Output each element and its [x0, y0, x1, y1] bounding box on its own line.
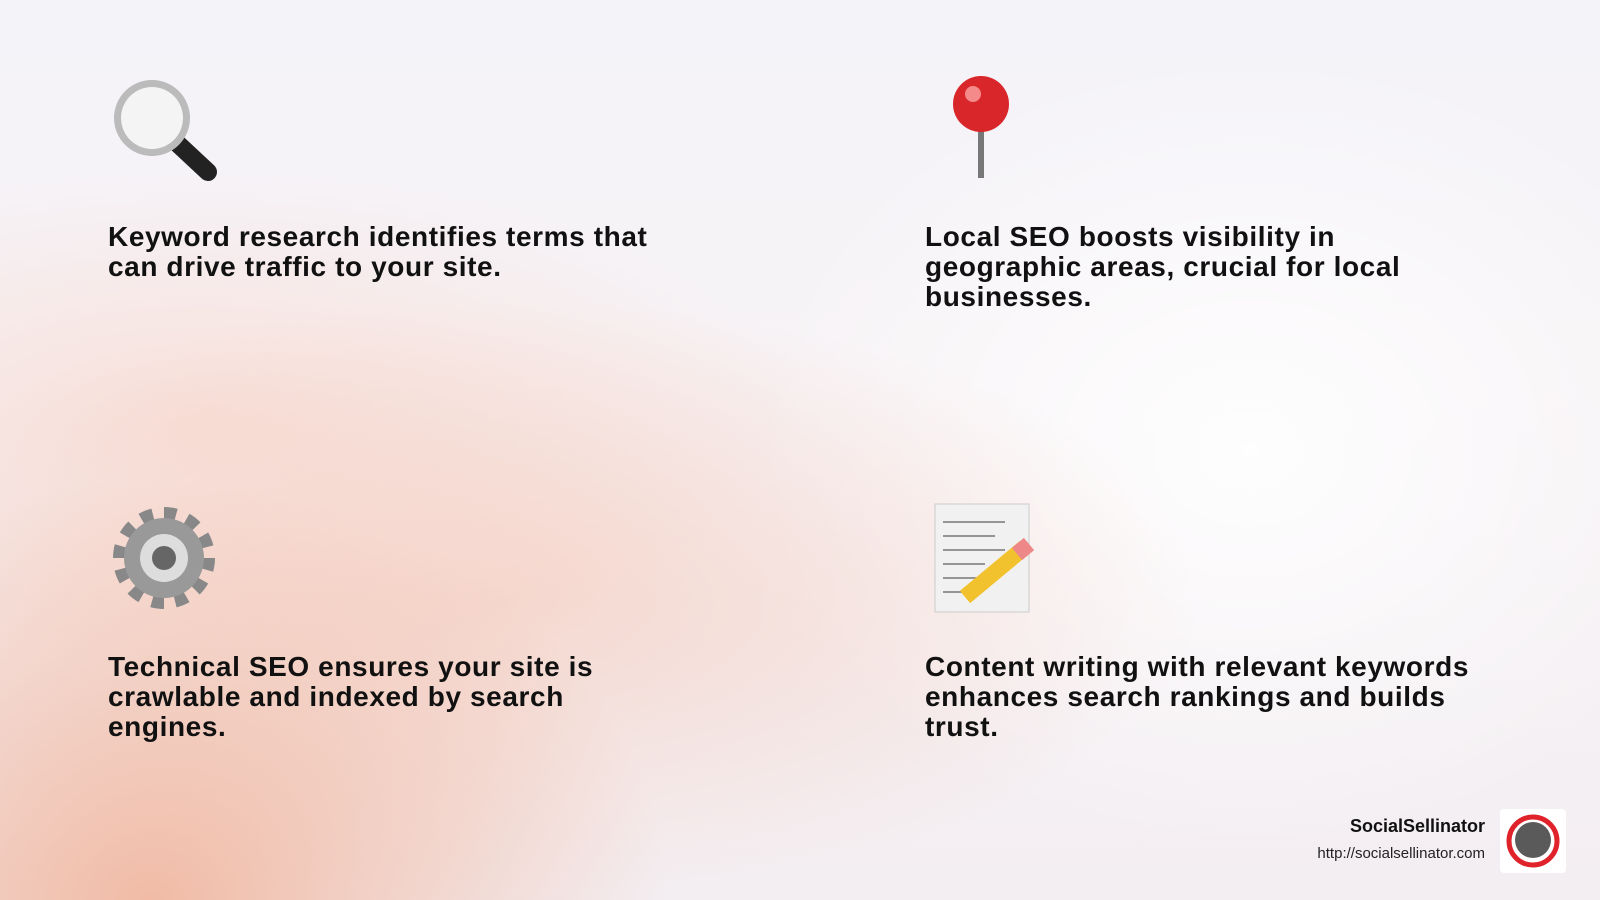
brand url: http://socialsellinator.com	[1317, 845, 1485, 862]
brand name: SocialSellinator	[1350, 816, 1485, 836]
text: local seo: Local SEO boosts visibility in geographic areas, crucial for local businesses.	[925, 221, 1400, 312]
brand block	[1317, 809, 1566, 873]
text: technical seo: Technical SEO ensures your site is crawlable and indexed by search engines.	[108, 651, 593, 742]
icon: pin	[953, 76, 1009, 178]
text: keyword research: Keyword research identifies terms that can drive traffic to your site.	[108, 221, 647, 282]
icon: memo	[934, 504, 1034, 612]
text: content writing: Content writing with relevant keywords enhances search rankings and builds trust.	[925, 651, 1469, 742]
logo	[1500, 809, 1566, 873]
icon: gear	[113, 507, 215, 609]
icon: magnifier	[114, 80, 217, 181]
